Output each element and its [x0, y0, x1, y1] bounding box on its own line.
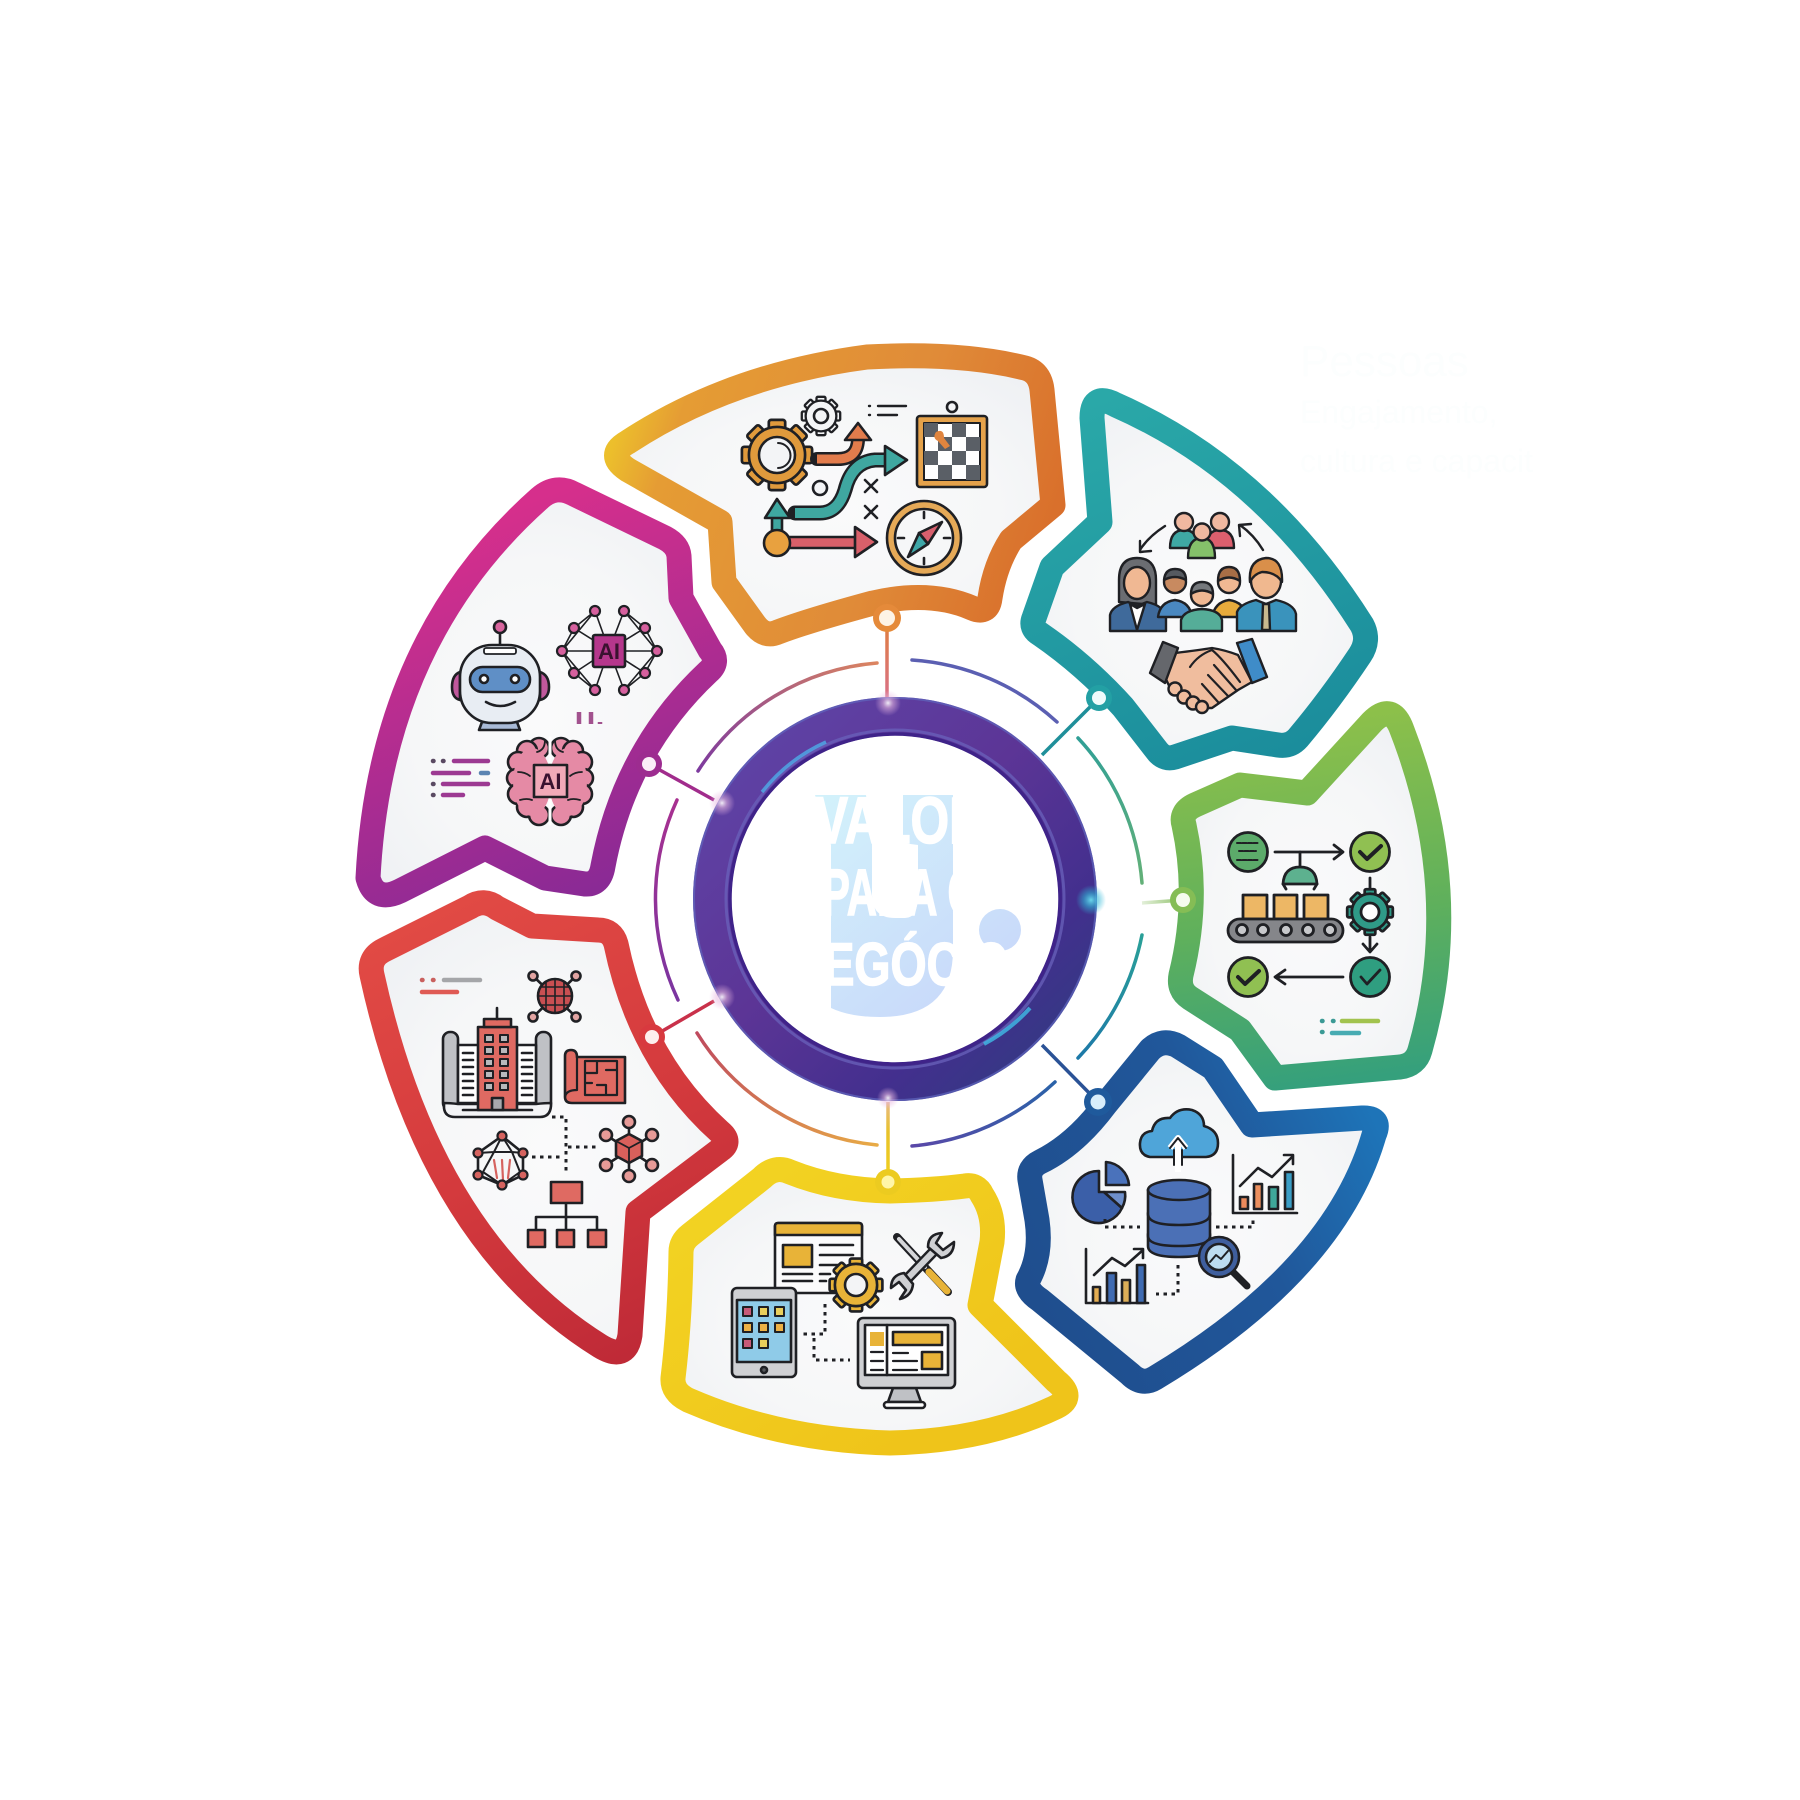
icon: up arrow: [765, 499, 790, 535]
icon: data analytics: [1072, 1109, 1297, 1303]
icon: chess board: [917, 402, 987, 487]
icon: gear: [1347, 878, 1393, 952]
panel frame: [1180, 714, 1439, 1078]
icon: woman: [1110, 558, 1166, 631]
icon: pie chart: [1072, 1162, 1129, 1223]
icon: boxes: [1243, 895, 1328, 919]
icon: neural network chip: [557, 606, 662, 695]
icon: tools: [891, 1233, 954, 1299]
panel frame: [368, 490, 715, 895]
legend marks: [1322, 1021, 1378, 1033]
icon: robot: [452, 621, 549, 730]
icon: blueprint scroll and tower: [443, 1008, 551, 1117]
central hub ring: [694, 690, 1106, 1109]
hub white disc: [732, 736, 1058, 1062]
connector arcs around the hub: [655, 660, 1142, 1146]
icon: check circle dark: [1350, 958, 1390, 996]
icon: orange route arrow: [817, 423, 871, 459]
icon: database: [1148, 1180, 1210, 1257]
legend marks: [422, 980, 480, 992]
icon: robot claw: [1283, 852, 1317, 889]
icon: bottom arrow: [1275, 970, 1343, 984]
icon: document circle: [1228, 832, 1268, 872]
panel frame: [1033, 401, 1366, 758]
icon: right bar chart: [1233, 1155, 1297, 1213]
hub title: [790, 783, 1040, 998]
panel frame: [616, 356, 1053, 634]
icon: cloud upload: [1140, 1109, 1218, 1172]
icon: red arrow: [764, 527, 877, 557]
panel: strategy (orange): [616, 356, 1053, 634]
hub ring bevel: [694, 698, 1096, 1100]
panel: people (teal): [1033, 401, 1366, 758]
connector node: [873, 604, 901, 632]
icon: team cycle arrows: [1140, 524, 1263, 552]
connector node: [636, 751, 662, 777]
icon: check circle final: [1228, 958, 1268, 996]
connector node: [875, 1169, 901, 1195]
panel: artificial intelligence (magenta): [368, 490, 715, 895]
icon: blueprint: [565, 1050, 625, 1103]
dotted links: [1105, 1219, 1253, 1294]
icon: people and handshake: [1110, 513, 1296, 713]
icon: top arrow: [1275, 845, 1343, 859]
marks: small bars: [579, 712, 600, 724]
connector node: [1170, 887, 1196, 913]
icon: compass: [887, 501, 961, 575]
icon: handshake: [1150, 639, 1267, 713]
hub ring body: [712, 716, 1078, 1082]
legend marks: [433, 761, 488, 795]
panel: systems (yellow): [673, 1169, 1066, 1443]
icon: note lines: [869, 406, 906, 415]
icon: production flow: [1228, 832, 1393, 996]
connector node: [1086, 685, 1112, 711]
icon: globe network: [528, 972, 580, 1022]
panel: architecture (red): [371, 903, 726, 1352]
dotted links: [801, 1304, 850, 1360]
panel frame: [673, 1170, 1066, 1443]
panel: data (blue): [1028, 1043, 1376, 1381]
icon: org chart: [528, 1182, 606, 1247]
icon: check circle: [1350, 832, 1390, 872]
icon: enterprise architecture: [443, 972, 658, 1247]
dotted links: [532, 1117, 600, 1175]
hub title: PARA O: [822, 855, 980, 929]
connectors from hub to panels: [649, 620, 1183, 1180]
hub sparkles: [709, 690, 1106, 1109]
icon: brain chip: [507, 738, 593, 825]
icon: artificial intelligence: [452, 606, 662, 825]
icon: large gear: [742, 420, 812, 490]
icon: teal route arrow: [795, 446, 907, 513]
icon: gear: [830, 1259, 882, 1311]
panel frame: [1028, 1043, 1376, 1381]
faint label: Pessoas: cultura e capacit: [1300, 443, 1533, 479]
icon: man in tie: [1237, 558, 1296, 631]
label: AI chip: AI: [598, 639, 620, 664]
icon: small gear: [802, 397, 840, 435]
panel: processes (green): [1170, 714, 1439, 1078]
label: AI brain: AI: [540, 769, 562, 794]
panel frame: [371, 903, 726, 1352]
hub logo: y mark: [815, 795, 1021, 1017]
faint label: Pessoas: [1300, 337, 1533, 479]
hub title: VALOR: [815, 783, 985, 857]
icon: small group: [1170, 513, 1234, 558]
icon: central colleague: [1181, 582, 1222, 631]
icon: tablet: [732, 1288, 796, 1377]
icon: magnifier: [1199, 1237, 1247, 1286]
icon: browser window: [775, 1223, 862, 1293]
icon: systems: [732, 1223, 955, 1408]
hub title: NEGÓCIOS: [790, 931, 1040, 998]
icon: hexagon network: [474, 1132, 528, 1190]
icon: monitor: [858, 1318, 955, 1408]
faint label: Pessoas: Pessoas: [1300, 337, 1469, 386]
icon: left bar chart: [1086, 1249, 1148, 1303]
connector node: [1084, 1088, 1112, 1116]
icon: conveyor belt: [1228, 919, 1343, 942]
icon: left colleague: [1158, 569, 1192, 617]
icon: crosses: [865, 480, 877, 518]
icon: strategy: [742, 397, 987, 575]
icon: right colleague: [1212, 567, 1247, 617]
icon: cube network: [600, 1116, 658, 1182]
faint label: Pessoas: Engajamento,: [1300, 394, 1497, 430]
connector node: [639, 1024, 665, 1050]
icon: small circle: [813, 481, 827, 495]
